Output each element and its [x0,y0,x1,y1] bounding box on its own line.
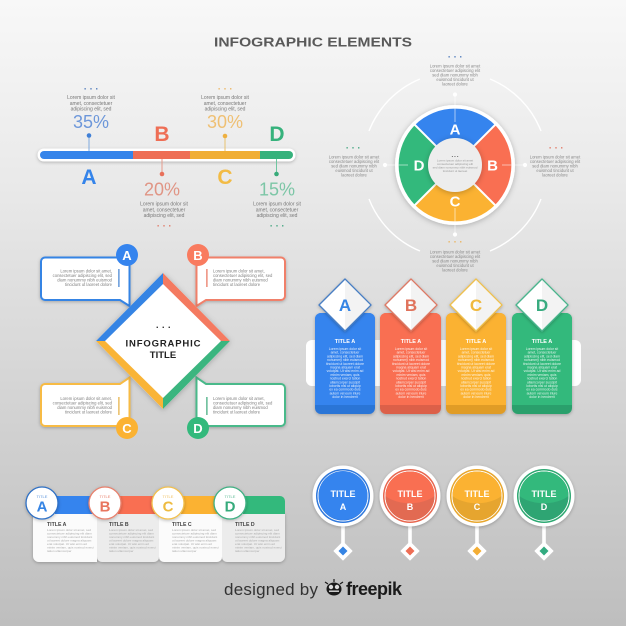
tab A: minim veniam, quis nostrud exerci [47,546,94,550]
callout D: consectetuer adipiscing elit, sed [213,400,273,406]
tab B: B [100,498,111,516]
donut ring [395,105,515,225]
donut note bottom: consectetuer adipiscing elit [430,254,481,259]
tab C: tation ullamcorper [172,549,197,553]
donut letters [414,122,498,210]
timeline item B: B [154,123,170,146]
card A: minim veniam, quis [330,373,360,377]
donut note bottom: laoreet dolore [442,268,468,272]
card B: autem vel eum iriure [396,391,426,395]
callout A: tincidunt ut laoreet dolore [65,282,113,287]
footer credit [224,579,403,599]
timeline item C: C [217,166,233,189]
tab B: erat volutpat. Ut wisi enim ad [109,542,149,546]
donut letters: B [487,158,498,174]
timeline item B: Lorem ipsum dolor sit [140,202,189,208]
card C: minim veniam, quis [461,373,491,377]
tab D: erat volutpat. Ut wisi enim ad [235,542,275,546]
card C: ex ea commodo duis [460,388,492,392]
badge A: TITLE [330,489,356,499]
tab D: D [225,498,236,516]
badge C: TITLE [464,489,490,499]
donut note top: euismod tincidunt ut [436,77,474,82]
diamond callouts [41,244,285,439]
badge B: TITLE [398,489,422,499]
tab B: nonummy nibh euismod tincidunt [109,535,154,539]
donut note right: sed diam nonummy nibh [532,164,578,168]
donut note left: ... [346,141,363,151]
tab B: TITLE [100,494,111,499]
donut note left: sed diam nonummy nibh [331,164,377,168]
tab B: ut laoreet dolore magna aliquam [109,538,154,542]
tab C: TITLE [163,494,174,499]
timeline item A: A [81,166,97,189]
donut note left: consectetuer adipiscing elit [329,159,380,164]
tab D: TITLE D [235,522,255,528]
donut note bottom: euismod tincidunt ut [436,263,474,268]
callout A: consectetuer adipiscing elit, sed [53,273,113,278]
timeline item C [201,82,250,189]
title: INFOGRAPHIC ELEMENTS [214,34,412,50]
badge A [312,466,374,560]
timeline item D: D [269,123,285,146]
card D: lobortis nisl ut aliquip [526,384,558,388]
timeline item D: Lorem ipsum dolor sit [253,202,302,208]
card C: tincidunt ut laoreet dolore [457,362,495,366]
tab A: TITLE A [47,522,67,528]
card A [315,279,375,414]
callout A: diam nonummy nibh euismod [57,278,113,282]
callout D [187,378,285,439]
central diamond: ... [156,320,174,330]
card A: ullamcorper suscipit [330,380,360,384]
donut note top [430,50,481,86]
card D: autem vel eum iriure [527,391,557,395]
donut note left: laoreet dolore [341,172,367,178]
tab D: Lorem ipsum dolor sit amet, sed [235,528,279,532]
card B: ex ea commodo duis [395,388,427,392]
tab A: consectetuer adipiscing elit diam [47,532,92,536]
timeline item B: 20% [144,180,180,200]
timeline chart [38,82,302,229]
donut note right: ... [549,141,566,151]
timeline item D: adipiscing elit, sed [257,213,298,219]
card B: lobortis nisl ut aliquip [395,384,427,388]
card D: tincidunt ut laoreet dolore [523,362,561,366]
card A: autem vel eum iriure [330,391,360,395]
donut note bottom: Lorem ipsum dolor sit amet [430,250,481,254]
timeline item B [140,123,189,229]
timeline item A: amet, consectetuer [70,101,113,107]
card C: volutpat. Ut wisi enim ad [458,369,494,373]
donut note top: consectetuer adipiscing elit [430,68,481,73]
card D: minim veniam, quis [527,373,557,377]
tab C: nonummy nibh euismod tincidunt [172,535,217,539]
tab A: erat volutpat. Ut wisi enim ad [47,542,87,546]
tab C: consectetuer adipiscing elit diam [172,532,217,536]
badge C: C [474,502,481,512]
donut note bottom: ... [448,235,465,245]
column cards [306,279,581,414]
tab A: A [37,498,48,516]
central diamond: INFOGRAPHIC [126,338,201,350]
donut note right: euismod tincidunt ut [536,168,574,173]
tab A: nonummy nibh euismod tincidunt [47,535,92,539]
card D: Lorem ipsum dolor sit [526,347,558,351]
timeline item A: 35% [73,112,109,132]
card B: dolor in hendrerit [398,395,424,399]
card D: ex ea commodo duis [526,388,558,392]
card C: Lorem ipsum dolor sit [460,347,492,351]
card A: ex ea commodo duis [329,388,361,392]
donut note right: Lorem ipsum dolor sit amet [530,154,581,160]
donut diagram [329,50,581,273]
tab A: ut laoreet dolore magna aliquam [47,538,92,542]
card C: TITLE A [466,339,486,345]
card A: amet, consectetuer [331,351,360,355]
card B: amet, consectetuer [397,351,426,355]
donut note top: laoreet dolore [442,82,468,86]
card C: adipiscing elit, sed diam [458,354,494,358]
donut center text: Lorem ipsum dolor sit amet [437,158,473,162]
donut center text: tincidunt ut laoreet [443,169,467,173]
donut note top: Lorem ipsum dolor sit amet [430,64,481,68]
timeline item D [253,123,302,229]
timeline item D: 15% [259,180,295,200]
tab A: Lorem ipsum dolor sit amet, sed [47,528,91,532]
callout D: Lorem ipsum dolor sit amet, [213,396,265,401]
card B: nonummy nibh euismod [393,358,429,362]
card B: Lorem ipsum dolor sit [395,347,427,351]
card B: ullamcorper suscipit [396,380,426,384]
card C: amet, consectetuer [462,351,491,355]
callout C [41,378,138,439]
card D: ullamcorper suscipit [527,380,557,384]
callout B: tincidunt ut laoreet dolore [213,282,261,287]
badge D: D [541,502,548,512]
footer credit: designed by [224,580,318,599]
tab A: TITLE [37,494,48,499]
callout A [41,244,138,306]
card A: dolor in hendrerit [332,395,358,399]
callout C: Lorem ipsum dolor sit amet, [60,396,112,401]
tab C: TITLE C [172,522,192,528]
donut letters: C [450,194,461,210]
tab D: nonummy nibh euismod tincidunt [235,535,280,539]
icon: freepik bee [325,579,343,596]
callout B: consectetuer adipiscing elit, sed [213,273,273,278]
callout B: diam nonummy nibh euismod [213,278,268,282]
footer credit: freepik [346,579,403,599]
card C [446,279,506,414]
badge B: B [407,502,414,512]
donut center text: consectetuer adipiscing elit [437,162,473,166]
timeline item A: Lorem ipsum dolor sit [67,95,116,101]
card A: TITLE A [335,339,355,345]
badge C [446,466,508,560]
tabbed cards [26,487,285,562]
tab D: consectetuer adipiscing elit diam [235,532,280,536]
badge D [514,466,574,560]
tab D: tation ullamcorper [235,549,260,553]
tab C: ut laoreet dolore magna aliquam [172,538,217,542]
tab B: TITLE B [109,522,129,528]
card B: adipiscing elit, sed diam [393,354,429,358]
timeline item C: 30% [207,112,243,132]
card D: adipiscing elit, sed diam [524,354,560,358]
card A: A [339,296,351,315]
callout D: D [193,421,203,436]
tab C [152,487,219,553]
central diamond: TITLE [150,350,176,361]
donut letters: D [414,158,425,174]
timeline bar [38,148,296,162]
timeline item B: amet, consectetuer [143,208,186,214]
timeline item B: ... [157,219,174,229]
donut center text: sed diam nonummy nibh euismod [433,166,478,170]
connector ticks [383,93,527,236]
badge B [380,466,440,560]
timeline item C: ... [218,82,235,92]
donut note left [329,141,380,178]
donut letters: A [450,122,461,138]
tab C: minim veniam, quis nostrud exerci [172,546,219,550]
card A: tincidunt ut laoreet dolore [326,362,364,366]
card D: nonummy nibh euismod [524,358,560,362]
donut note left: euismod tincidunt ut [335,168,373,173]
card C: C [470,296,482,315]
timeline item B: adipiscing elit, sed [144,213,185,219]
timeline item D: ... [270,219,287,229]
donut note top: ... [448,50,465,60]
donut note left: Lorem ipsum dolor sit amet [329,154,380,160]
central diamond [96,273,230,409]
card D: nostrud exerci tation [527,377,557,381]
card A: nonummy nibh euismod [327,358,363,362]
card B: volutpat. Ut wisi enim ad [393,369,429,373]
timeline item D: amet, consectetuer [256,208,299,214]
card A: nostrud exerci tation [330,377,360,381]
donut note right [530,141,581,178]
card D: amet, consectetuer [528,351,557,355]
timeline item C: Lorem ipsum dolor sit [201,95,250,101]
timeline item C: amet, consectetuer [204,101,247,107]
tab B: minim veniam, quis nostrud exerci [109,546,156,550]
circle badges [312,466,574,560]
card C: magna aliquam erat [461,366,491,370]
timeline item A: ... [84,82,101,92]
card C: lobortis nisl ut aliquip [460,384,492,388]
tab D [214,487,282,553]
tab B: tation ullamcorper [109,549,134,553]
tab B: consectetuer adipiscing elit diam [109,532,154,536]
donut center text [433,153,478,173]
card C: dolor in hendrerit [463,395,489,399]
tab band [55,496,285,514]
card B: tincidunt ut laoreet dolore [392,362,430,366]
timeline item C: adipiscing elit, sed [205,106,246,112]
donut note top: sed diam nonummy nibh [432,72,478,78]
badge A: A [340,502,347,512]
card B: minim veniam, quis [396,373,426,377]
donut note right: laoreet dolore [542,172,568,178]
card D: TITLE A [532,339,552,345]
card D [512,279,572,414]
tab A [26,487,94,553]
card B: magna aliquam erat [396,366,426,370]
callout D: tincidunt ut laoreet dolore [213,410,261,414]
card D: magna aliquam erat [527,366,557,370]
donut note right: consectetuer adipiscing elit [530,159,581,164]
card B [380,279,441,414]
callout C: diam nonummy nibh euismod [57,405,113,410]
callout C: tincidunt ut laoreet dolore [65,410,113,414]
donut center text: ... [451,153,460,159]
card A: Lorem ipsum dolor sit [329,347,361,351]
callout A: Lorem ipsum dolor sit amet, [60,268,112,274]
tab C: erat volutpat. Ut wisi enim ad [172,542,212,546]
card B: TITLE A [401,339,421,345]
card A: lobortis nisl ut aliquip [329,384,361,388]
card C: ullamcorper suscipit [461,380,491,384]
outer arcs [369,79,541,251]
card C: nonummy nibh euismod [458,358,494,362]
card C: nostrud exerci tation [461,377,491,381]
tab A: tation ullamcorper [47,549,72,553]
callout A: A [122,248,132,263]
card D: D [536,296,548,315]
card A: volutpat. Ut wisi enim ad [327,369,363,373]
donut note bottom [430,235,481,272]
tab D: TITLE [225,494,236,499]
callout B: B [193,248,203,263]
timeline item A: adipiscing elit, sed [71,106,112,112]
callout B: Lorem ipsum dolor sit amet, [213,268,265,274]
card A: magna aliquam erat [330,366,360,370]
callout D: diam nonummy nibh euismod [213,405,268,410]
card C: autem vel eum iriure [461,391,491,395]
tab B: Lorem ipsum dolor sit amet, sed [109,528,153,532]
callout C: consectetuer adipiscing elit, sed [53,400,113,406]
tab C: C [163,498,174,516]
timeline item A [67,82,116,189]
callout B [187,244,285,306]
tab card panels [33,513,285,562]
card A: adipiscing elit, sed diam [327,354,363,358]
badge D: TITLE [532,489,556,499]
tab C: Lorem ipsum dolor sit amet, sed [172,528,216,532]
tab B [89,487,156,553]
white band [306,340,581,386]
card D: volutpat. Ut wisi enim ad [524,369,560,373]
callout C: C [122,421,132,436]
card B: B [405,296,417,315]
card D: dolor in hendrerit [529,395,555,399]
donut note bottom: sed diam nonummy nibh [432,258,478,264]
card B: nostrud exerci tation [396,377,426,381]
tab D: minim veniam, quis nostrud exerci [235,546,282,550]
tab D: ut laoreet dolore magna aliquam [235,538,280,542]
